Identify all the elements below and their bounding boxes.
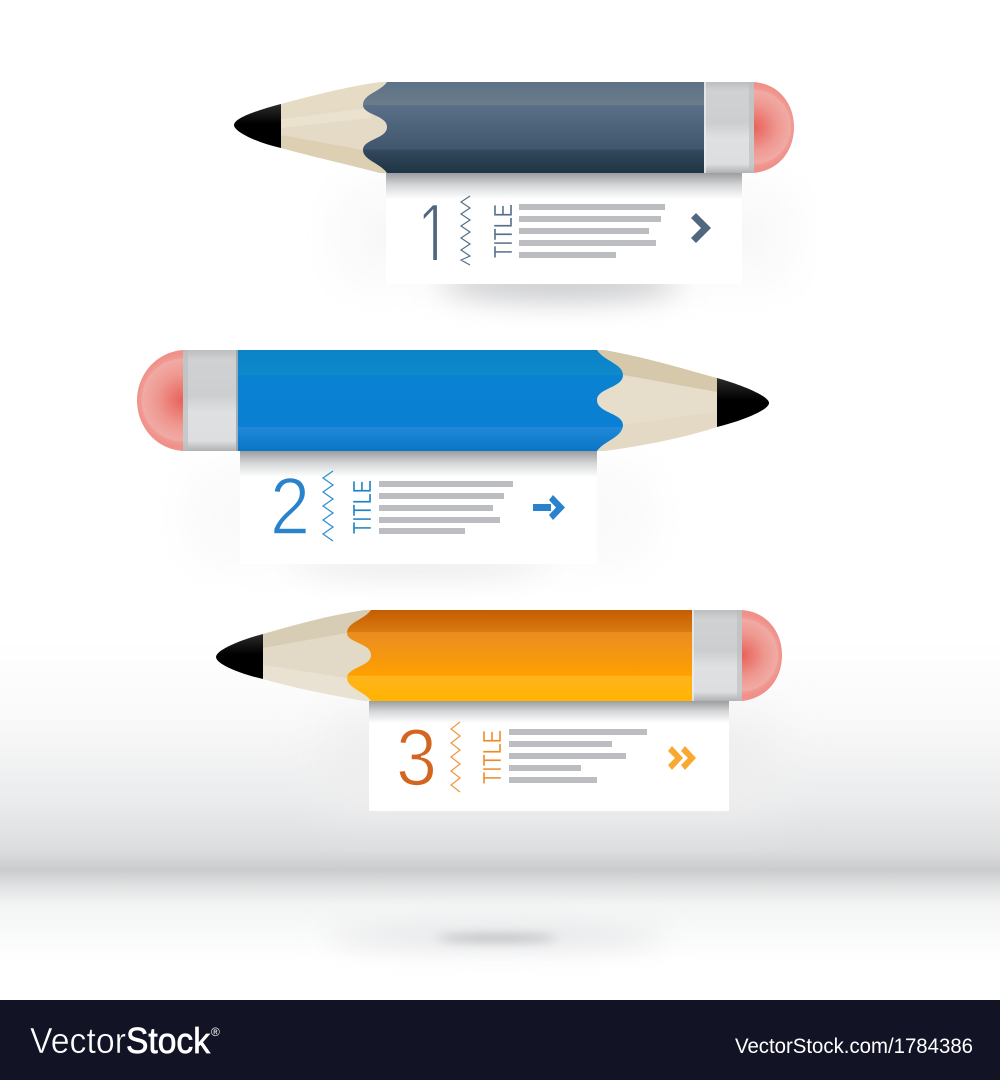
zigzag 3 xyxy=(451,722,460,792)
body 3 xyxy=(347,610,692,701)
footer logo: Vector xyxy=(30,1020,126,1061)
pencil step 2 xyxy=(137,350,769,576)
number 2: 2 xyxy=(270,462,310,552)
eraser 1 xyxy=(754,82,794,173)
icon: double chevron xyxy=(668,746,696,770)
title 3: TITLE xyxy=(477,730,507,784)
ferrule 3 xyxy=(692,610,742,701)
pencil step 1 xyxy=(234,82,794,300)
card shadow 2 xyxy=(190,470,650,576)
lead 2 xyxy=(717,378,769,427)
body 2 xyxy=(238,350,623,451)
wood 2 xyxy=(597,350,717,451)
footer bar xyxy=(0,1000,1000,1080)
eraser 3 xyxy=(742,610,782,701)
zigzag 2 xyxy=(323,471,333,541)
card shadow 3 xyxy=(330,720,770,810)
body 1 xyxy=(363,82,704,173)
card 1 xyxy=(386,173,742,286)
zigzag 1 xyxy=(461,196,470,265)
icon: arrow xyxy=(533,495,565,520)
footer url: VectorStock.com/1784386 xyxy=(735,1035,973,1058)
footer registered mark: ® xyxy=(211,1025,220,1039)
card 2 xyxy=(240,451,597,564)
ferrule 1 xyxy=(704,82,754,173)
text lines 3 xyxy=(509,729,647,783)
icon: chevron xyxy=(691,213,711,243)
wood 3 xyxy=(263,610,371,701)
card shadow 1 xyxy=(340,190,790,300)
eraser 2 xyxy=(137,350,183,451)
wood 1 xyxy=(281,82,387,173)
floor shadow xyxy=(327,928,667,946)
number 1: 1 xyxy=(417,186,451,286)
text lines 1 xyxy=(519,204,665,258)
lead 3 xyxy=(216,634,263,679)
number 3: 3 xyxy=(396,713,437,803)
title 1: TITLE xyxy=(488,204,518,258)
title 2: TITLE xyxy=(347,480,377,534)
footer logo: Stock xyxy=(126,1020,211,1061)
card 3 xyxy=(369,701,729,811)
lead 1 xyxy=(234,104,281,148)
footer logo xyxy=(30,1020,211,1061)
pencil step 3 xyxy=(216,610,782,811)
ferrule 2 xyxy=(183,350,238,451)
text lines 2 xyxy=(379,481,513,534)
